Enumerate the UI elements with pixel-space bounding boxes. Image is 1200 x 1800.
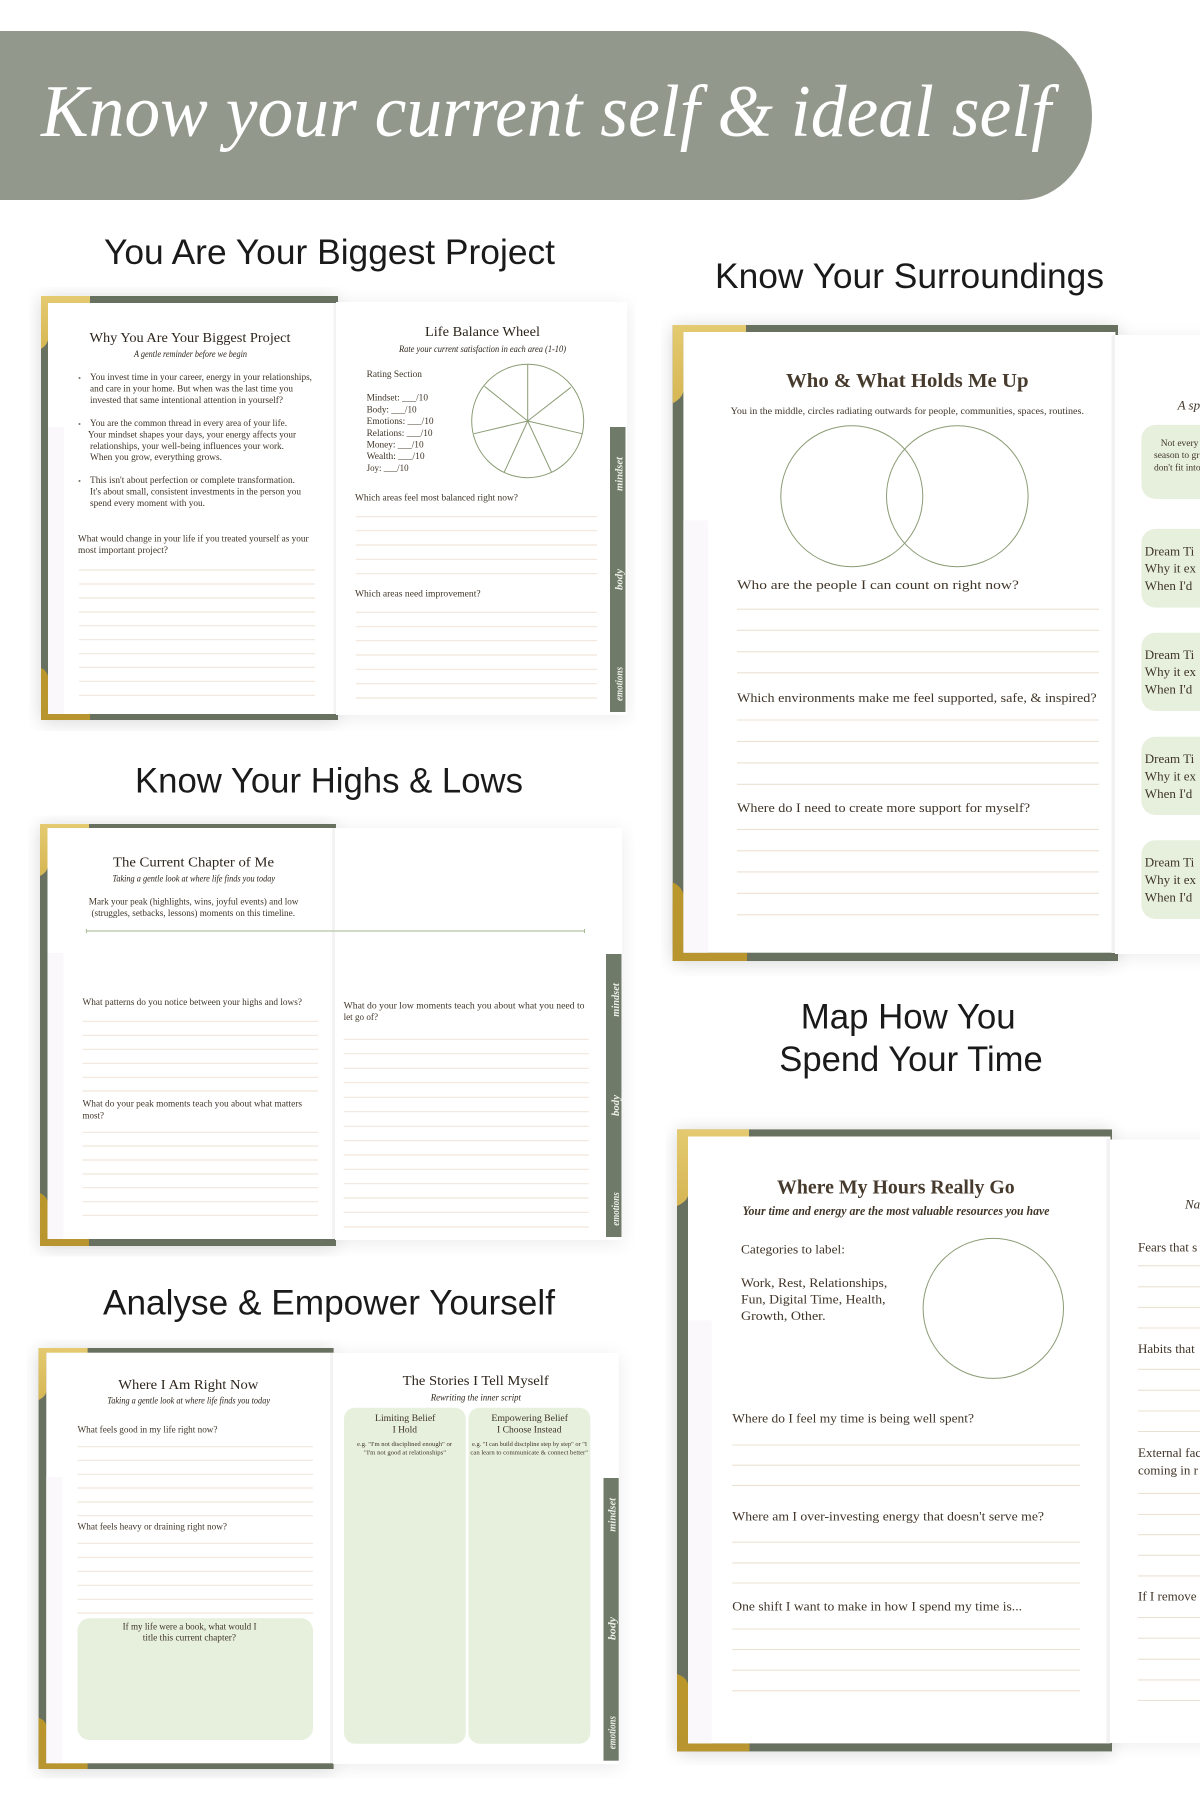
side tab: emotions bbox=[608, 1716, 618, 1749]
page subtitle: A gentle reminder before we begin bbox=[133, 349, 247, 359]
dream card 4: Dream Ti bbox=[1145, 854, 1195, 869]
right page, cropped at edge bbox=[1110, 1140, 1200, 1743]
column: limiting belief: "I'm not good at relationships" bbox=[364, 1450, 447, 1456]
timeline bbox=[86, 929, 585, 933]
dream card 1: When I'd bbox=[1145, 578, 1193, 593]
rating section: Mindset: ___/10 bbox=[367, 394, 428, 404]
question: environments bbox=[737, 690, 1099, 784]
question: if I removed: If I remove bbox=[1138, 1588, 1197, 1603]
dream card 3: Why it ex bbox=[1145, 768, 1197, 784]
question: well spent bbox=[732, 1411, 1080, 1485]
categories list: Categories to label: bbox=[741, 1242, 845, 1256]
venn diagram bbox=[781, 426, 1028, 567]
question: external factors: coming in r bbox=[1138, 1462, 1199, 1478]
column: empowering belief: can learn to communicate & connect better" bbox=[470, 1450, 589, 1456]
question: patterns: What patterns do you notice between your highs and lows? bbox=[82, 998, 302, 1008]
page title: Where My Hours Really Go bbox=[777, 1176, 1015, 1198]
page subtitle: Taking a gentle look at where life finds you today bbox=[107, 1396, 270, 1406]
rating section: Joy: ___/10 bbox=[367, 464, 409, 474]
page subtitle: Rewriting the inner script bbox=[430, 1392, 521, 1402]
heading: Know Your Highs & Lows: Know Your Highs & Lows bbox=[135, 762, 523, 801]
dream card 1: Why it ex bbox=[1145, 561, 1197, 576]
page title: Why You Are Your Biggest Project bbox=[90, 330, 291, 345]
bullet list bbox=[78, 373, 312, 509]
bullet list: When you grow, everything grows. bbox=[90, 453, 222, 463]
book cover bbox=[41, 296, 338, 720]
rating section: Relations: ___/10 bbox=[367, 429, 433, 439]
column: limiting belief: I Hold bbox=[393, 1426, 417, 1436]
question: peak moments: What do your peak moments teach you about what matters bbox=[82, 1100, 302, 1110]
column: limiting belief: Limiting Belief bbox=[375, 1413, 436, 1424]
life balance wheel bbox=[472, 364, 584, 478]
side tab: emotions bbox=[614, 667, 626, 701]
right page bbox=[336, 302, 627, 715]
question: external factors: External fac bbox=[1138, 1445, 1200, 1460]
dream card 4: Why it ex bbox=[1145, 872, 1197, 887]
bullet list: relationships, your well-being influences your work. bbox=[90, 441, 284, 452]
column: empowering belief bbox=[468, 1408, 590, 1744]
question with writing lines: What would change in your life if you treated yourself as your bbox=[78, 534, 309, 545]
question: areas to improve: Which areas need improvement? bbox=[355, 590, 481, 600]
heading: Map How You Spend Your Time: Spend Your Time bbox=[779, 1040, 1043, 1079]
dream card 4 bbox=[1141, 840, 1200, 919]
question with writing lines bbox=[78, 534, 315, 695]
bullet list: You are the common thread in every area of your life. bbox=[90, 418, 287, 429]
intro note bbox=[1141, 425, 1200, 499]
side tab: mindset bbox=[614, 456, 626, 491]
bullet list: It's about small, consistent investments in the person you bbox=[90, 488, 301, 498]
dream card 2 bbox=[1141, 633, 1200, 711]
question: areas to improve bbox=[355, 590, 597, 698]
column: limiting belief bbox=[344, 1408, 466, 1744]
side tab: mindset bbox=[611, 982, 622, 1017]
question: people: Who are the people I can count on right now? bbox=[737, 577, 1019, 592]
intro note: season to gr bbox=[1154, 451, 1200, 461]
panel: spread 4, surroundings journal bbox=[673, 325, 1200, 963]
side tab: mindset bbox=[608, 1497, 618, 1532]
instructions bbox=[89, 897, 299, 919]
categories list: Growth, Other. bbox=[741, 1308, 826, 1323]
side tab bbox=[610, 427, 626, 712]
page subtitle: Rate your current satisfaction in each area (1-10) bbox=[398, 344, 566, 354]
categories list: Work, Rest, Relationships, bbox=[741, 1275, 887, 1290]
question: peak moments bbox=[82, 1100, 318, 1215]
column: empowering belief: I Choose Instead bbox=[497, 1426, 562, 1436]
column: empowering belief: Empowering Belief bbox=[491, 1413, 569, 1424]
callout box: book title bbox=[78, 1618, 313, 1740]
bullet list: invested that same intentional attention in yourself? bbox=[90, 395, 283, 406]
panel: spread 1, biggest project journal bbox=[41, 296, 628, 722]
dream card 2: Dream Ti bbox=[1145, 647, 1195, 662]
question: habits: Habits that bbox=[1138, 1341, 1195, 1356]
right page, cropped at edge bbox=[1115, 335, 1200, 954]
question: habits bbox=[1138, 1341, 1200, 1432]
side tab: body bbox=[614, 568, 626, 590]
side tab: body bbox=[611, 1094, 622, 1116]
dream card 3: Dream Ti bbox=[1145, 751, 1195, 766]
page title: The Current Chapter of Me bbox=[113, 855, 274, 870]
panel: spread 2, highs and lows journal bbox=[40, 824, 623, 1248]
question: one shift: One shift I want to make in how I spend my time is... bbox=[732, 1598, 1022, 1613]
left page bbox=[46, 1353, 334, 1763]
rating section: Emotions: ___/10 bbox=[367, 417, 434, 427]
question: well spent: Where do I feel my time is being well spent? bbox=[732, 1411, 974, 1426]
panel: spread 5, time map journal bbox=[677, 1129, 1200, 1753]
heading: Know Your Surroundings: Know Your Surroundings bbox=[715, 257, 1104, 296]
question: one shift bbox=[732, 1598, 1080, 1691]
question: balanced areas: Which areas feel most balanced right now? bbox=[355, 493, 518, 504]
left page bbox=[683, 332, 1115, 953]
question: low moments: let go of? bbox=[344, 1012, 378, 1023]
side tab: body bbox=[608, 1616, 618, 1640]
question: if I removed bbox=[1138, 1588, 1200, 1700]
page subtitle: You in the middle, circles radiating outwards for people, communities, spaces, routines. bbox=[731, 406, 1084, 417]
question: feels heavy bbox=[78, 1522, 313, 1613]
left page bbox=[48, 828, 336, 1239]
page title: The Stories I Tell Myself bbox=[403, 1373, 549, 1388]
categories list: Fun, Digital Time, Health, bbox=[741, 1292, 886, 1307]
question: over-investing bbox=[732, 1508, 1080, 1583]
right page bbox=[333, 1353, 619, 1764]
bullet list: and care in your home. But when was the last time you bbox=[90, 384, 293, 394]
bullet list: spend every moment with you. bbox=[90, 499, 205, 509]
page title: Life Balance Wheel bbox=[425, 324, 540, 339]
question: environments: Which environments make me feel supported, safe, & inspired? bbox=[737, 690, 1097, 705]
question: feels good bbox=[78, 1424, 313, 1516]
heading: Map How You Spend Your Time bbox=[779, 998, 1043, 1079]
left page bbox=[688, 1136, 1110, 1743]
rating section: Wealth: ___/10 bbox=[367, 452, 425, 462]
question: feels good: What feels good in my life right now? bbox=[78, 1424, 218, 1435]
book cover bbox=[40, 824, 336, 1246]
question: patterns bbox=[82, 998, 318, 1091]
page subtitle: Taking a gentle look at where life finds you today bbox=[112, 873, 275, 883]
intro note: don't fit into bbox=[1154, 462, 1200, 473]
cropped subtitle: A sp bbox=[1177, 398, 1200, 413]
rating section bbox=[367, 370, 434, 474]
book cover bbox=[677, 1129, 1112, 1751]
side tab bbox=[606, 954, 622, 1237]
instructions: (struggles, setbacks, lessons) moments on this timeline. bbox=[92, 908, 295, 919]
right page bbox=[335, 828, 622, 1240]
dream card 2: Why it ex bbox=[1145, 664, 1197, 679]
question: feels heavy: What feels heavy or draining right now? bbox=[78, 1522, 227, 1533]
question: peak moments: most? bbox=[82, 1111, 104, 1121]
dream card 1: Dream Ti bbox=[1145, 543, 1195, 558]
rating section: Rating Section bbox=[367, 370, 422, 380]
categories list bbox=[741, 1242, 887, 1323]
heading: You Are Your Biggest Project: You Are Your Biggest Project bbox=[104, 233, 555, 272]
left page bbox=[48, 303, 337, 714]
question: support: Where do I need to create more support for myself? bbox=[737, 800, 1030, 815]
rating section: Body: ___/10 bbox=[367, 405, 417, 415]
question: fears: Fears that s bbox=[1138, 1239, 1197, 1254]
dream card 3: When I'd bbox=[1145, 786, 1193, 801]
time circle bbox=[923, 1238, 1064, 1378]
question: fears bbox=[1138, 1239, 1200, 1328]
question with writing lines: most important project? bbox=[78, 546, 168, 556]
banner bbox=[0, 31, 1092, 200]
callout box: book title: title this current chapter? bbox=[143, 1634, 236, 1644]
question: support bbox=[737, 800, 1099, 915]
dream card 3 bbox=[1141, 737, 1200, 815]
callout box: book title: If my life were a book, what would I bbox=[123, 1621, 256, 1632]
page title: Who & What Holds Me Up bbox=[786, 370, 1028, 392]
panel: spread 3, analyse and empower journal bbox=[39, 1348, 620, 1771]
bullet list: Your mindset shapes your days, your energy affects your bbox=[88, 430, 297, 440]
bullet list: This isn't about perfection or complete transformation. bbox=[90, 475, 295, 486]
question: over-investing: Where am I over-investing energy that doesn't serve me? bbox=[732, 1508, 1044, 1523]
dream card 2: When I'd bbox=[1145, 681, 1193, 696]
instructions: Mark your peak (highlights, wins, joyful events) and low bbox=[89, 897, 299, 908]
column: empowering belief: e.g. "I can build discipline step by step" or "I bbox=[472, 1442, 587, 1448]
column: limiting belief: e.g. "I'm not disciplined enough" or bbox=[357, 1442, 452, 1448]
heading: Map How You Spend Your Time: Map How You bbox=[801, 998, 1016, 1036]
side tab: emotions bbox=[611, 1192, 622, 1226]
page title: Where I Am Right Now bbox=[118, 1377, 259, 1392]
book cover bbox=[39, 1348, 334, 1769]
question: people bbox=[737, 577, 1099, 673]
question: balanced areas bbox=[355, 493, 597, 574]
intro note: Not every bbox=[1161, 439, 1199, 449]
dream card 4: When I'd bbox=[1145, 889, 1193, 904]
banner title: Know your current self & ideal self bbox=[40, 71, 1060, 153]
question: low moments: What do your low moments teach you about what you need to bbox=[344, 1001, 585, 1011]
heading: Analyse & Empower Yourself: Analyse & Empower Yourself bbox=[103, 1283, 555, 1322]
question: external factors bbox=[1138, 1445, 1200, 1576]
cropped subtitle: Na bbox=[1184, 1196, 1200, 1212]
page subtitle: Your time and energy are the most valuable resources you have bbox=[743, 1203, 1050, 1218]
dream card 1 bbox=[1141, 529, 1200, 608]
rating section: Money: ___/10 bbox=[367, 440, 424, 450]
bullet list: You invest time in your career, energy in your relationships, bbox=[90, 373, 312, 383]
question: low moments bbox=[344, 1001, 589, 1227]
book cover bbox=[673, 325, 1118, 961]
side tab bbox=[604, 1478, 619, 1761]
